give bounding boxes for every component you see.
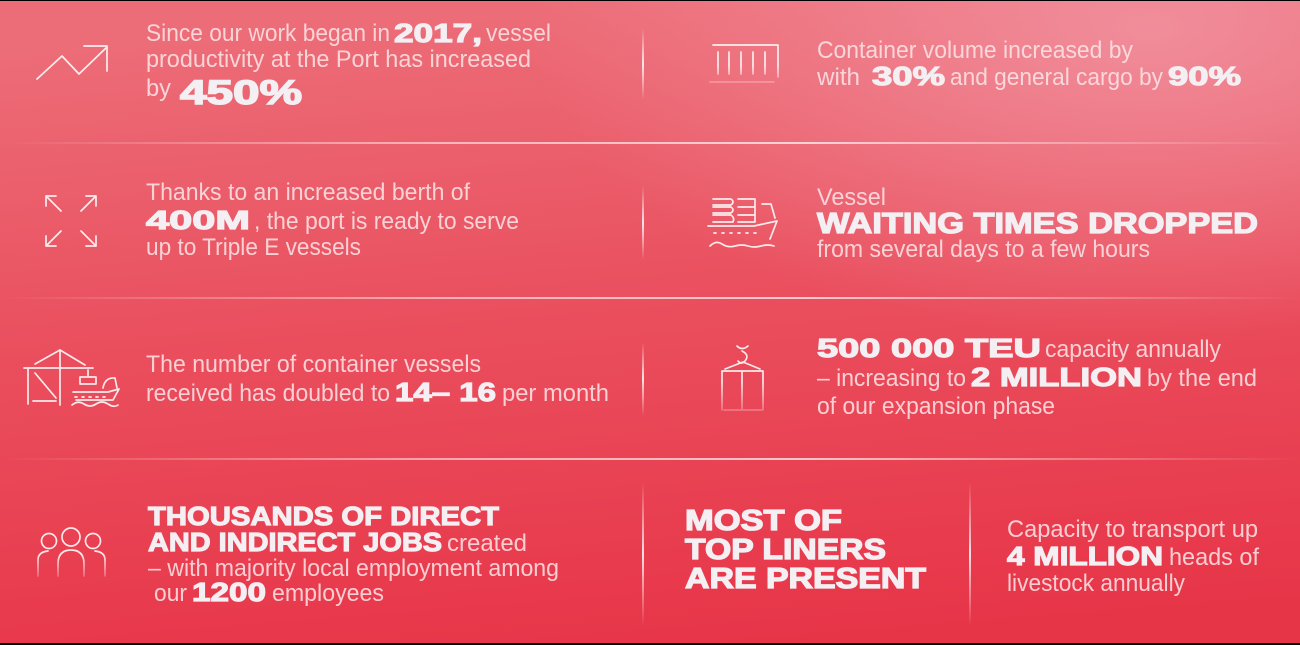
text block: container vessels received: 14– 16 xyxy=(395,377,496,407)
text block: TEU capacity xyxy=(817,333,1257,420)
text block: livestock capacity: Capacity to transport up xyxy=(1007,516,1258,543)
text block: jobs created: THOUSANDS OF DIRECT xyxy=(148,501,499,531)
text block: TEU capacity: of our expansion phase xyxy=(817,393,1055,420)
text block: berth length: up to Triple E vessels xyxy=(146,234,361,261)
text block: jobs created: AND INDIRECT JOBS xyxy=(148,527,442,557)
text block: waiting times: from several days to a few hours xyxy=(817,236,1150,263)
text block: container volume: 30% xyxy=(872,61,945,91)
text block: livestock capacity xyxy=(1007,516,1259,597)
text block: vessel productivity: 450% xyxy=(180,74,302,112)
text block: TEU capacity: capacity annually xyxy=(1045,336,1221,363)
text block: berth length: , the port is ready to serve xyxy=(254,208,519,235)
icon: shipping container xyxy=(710,45,778,82)
text block: container volume: 90% xyxy=(1168,61,1241,91)
icon: cargo ship on waves xyxy=(708,199,777,247)
text block: vessel productivity: by xyxy=(146,75,171,102)
text block: container vessels received: per month xyxy=(502,380,609,407)
text block: livestock capacity: heads of xyxy=(1169,544,1259,571)
text block: container vessels received: The number of container vessels xyxy=(146,351,481,378)
heading: top liners: MOST OF xyxy=(685,505,842,537)
text block: container volume: Container volume increased by xyxy=(817,37,1133,64)
text block: berth length: 400M xyxy=(146,205,250,235)
heading: top liners: ARE PRESENT xyxy=(685,563,926,595)
heading: top liners xyxy=(685,505,926,595)
text block: vessel productivity: vessel xyxy=(486,20,551,47)
text block: jobs created: created xyxy=(447,530,527,557)
text block: waiting times xyxy=(817,184,1258,263)
text block: jobs created: employees xyxy=(272,580,384,607)
text block: jobs created: – with majority local employment among xyxy=(148,555,559,582)
text block: container volume: with xyxy=(816,64,860,91)
text block: livestock capacity: 4 MILLION xyxy=(1007,541,1163,571)
text block: jobs created: 1200 xyxy=(192,577,266,607)
text block: container vessels received xyxy=(146,351,609,407)
icon: crane and vessel xyxy=(24,350,119,406)
text block: jobs created xyxy=(148,501,559,607)
text block: TEU capacity: by the end xyxy=(1147,365,1257,392)
text block: vessel productivity: Since our work began in xyxy=(146,20,390,47)
text block: TEU capacity: 500 000 TEU xyxy=(817,333,1041,363)
text block: container vessels received: received has doubled to xyxy=(146,380,390,407)
text block: container volume xyxy=(816,37,1241,91)
text block: livestock capacity: livestock annually xyxy=(1007,570,1185,597)
text block: waiting times: WAITING TIMES DROPPED xyxy=(817,208,1258,240)
icon: expanding arrows xyxy=(46,196,96,246)
text block: jobs created: our xyxy=(154,580,187,607)
text block: container volume: and general cargo by xyxy=(950,64,1163,91)
icon: rising trend arrow xyxy=(37,46,107,79)
heading: top liners: TOP LINERS xyxy=(685,534,886,566)
text block: vessel productivity: productivity at the Port has increased xyxy=(146,46,531,73)
text block: berth length: Thanks to an increased berth of xyxy=(146,179,470,206)
icon: group of people xyxy=(38,528,105,576)
icon: crane hook lifting container xyxy=(722,346,763,410)
text block: vessel productivity xyxy=(146,18,551,112)
text block: berth length xyxy=(146,179,519,261)
text block: waiting times: Vessel xyxy=(817,184,886,211)
text block: TEU capacity: – increasing to xyxy=(817,365,966,392)
text block: vessel productivity: 2017, xyxy=(394,18,482,48)
text block: TEU capacity: 2 MILLION xyxy=(971,362,1142,392)
